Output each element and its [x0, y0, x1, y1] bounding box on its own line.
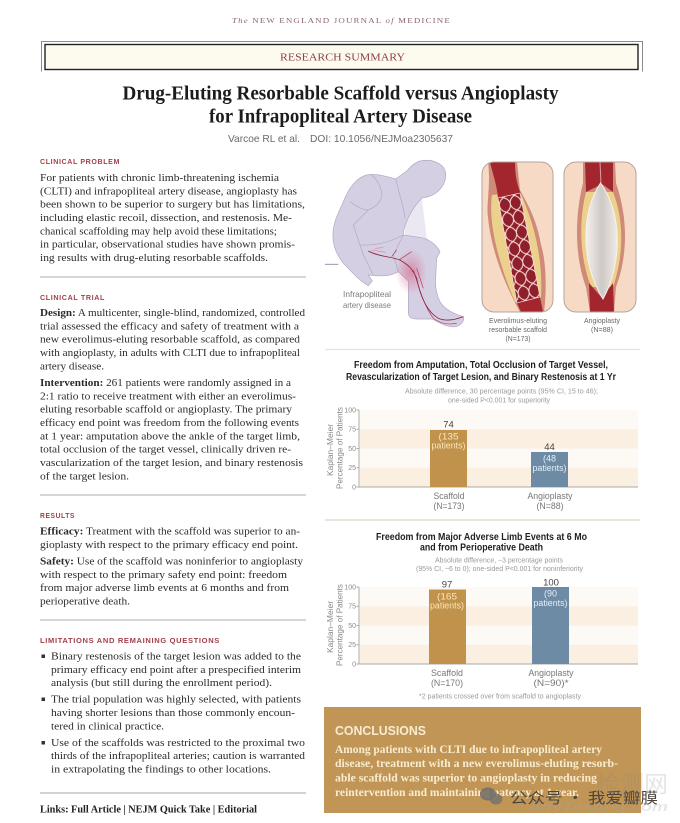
- chart subtitle: Absolute difference, −3 percentage points: [435, 558, 563, 564]
- citation: Varcoe RL et al.: [228, 133, 300, 145]
- text: intervention: total occlusion of the target vessel, clinically driven re-: [40, 444, 291, 456]
- panel: conclusions: CONCLUSIONS: [335, 724, 426, 738]
- panel: conclusions: [324, 707, 641, 813]
- text: efficacy: [40, 526, 300, 551]
- bar: angioplasty 100: (90: [544, 588, 557, 598]
- watermark: 公众号 · 我爱瓣膜: [510, 787, 658, 808]
- y axis labels: 25: [348, 642, 356, 649]
- panel: clinical trial: [40, 295, 306, 482]
- caption: scaffold: resorbable scaffold: [489, 325, 547, 334]
- bullet: trial population: [42, 694, 301, 732]
- bullet: trial population: tered in clinical practice.: [51, 720, 164, 732]
- conclusions text: disease, treatment with a new everolimus-eluting resorb-: [335, 758, 618, 770]
- conclusions text: Among patients with CLTI due to infrapopliteal artery: [335, 744, 602, 756]
- panel: limitations and remaining questions: LIMITATIONS AND REMAINING QUESTIONS: [40, 638, 220, 645]
- chart: primary safety end point: [325, 532, 638, 700]
- text: efficacy: Efficacy: Treatment with the scaffold was superior to an-: [40, 526, 300, 538]
- text: clinical problem body: For patients with chronic limb-threatening ischemia: [40, 172, 279, 184]
- label: infrapopliteal artery disease: [343, 289, 391, 310]
- chart subtitle: Absolute difference, 30 percentage points (95% CI, 15 to 46);: [405, 388, 598, 396]
- text: intervention: Intervention: 261 patients were randomly assigned in a: [40, 377, 291, 389]
- y axis labels: Percentage of Patients: [334, 584, 344, 666]
- caption: scaffold: (N=173): [506, 334, 531, 343]
- chart subtitle: (95% CI, −6 to 0); one-sided P<0.001 for noninferiority: [416, 566, 583, 573]
- caption: scaffold: [489, 316, 547, 343]
- text: intervention: at 1 year: amputation above the ankle of the target limb,: [40, 430, 300, 442]
- bar: scaffold 97: patients): [430, 600, 464, 610]
- y axis labels: [325, 407, 356, 492]
- text: intervention: efficacy end point was freedom from the following events: [40, 417, 299, 429]
- text: intervention: 2:1 ratio to receive treatment with either an everolimus-: [40, 390, 296, 402]
- citation: [228, 133, 453, 145]
- text: clinical problem body: including elastic recoil, dissection, and restenosis. Me-: [40, 212, 292, 224]
- bullet: use of scaffolds: thirds of the infrapopliteal arteries; caution is warranted: [51, 750, 306, 762]
- y axis labels: 75: [348, 604, 356, 610]
- chart subtitle: [416, 558, 583, 573]
- y axis labels: 0: [352, 662, 356, 668]
- bar: scaffold 74: (135: [438, 432, 458, 442]
- y axis labels: [325, 584, 356, 668]
- bar: scaffold 97: 97: [442, 580, 452, 590]
- y axis labels: 25: [348, 465, 356, 472]
- bullet: binary restenosis: primary efficacy end point after a prespecified interim: [51, 664, 301, 676]
- watermark: [480, 765, 669, 814]
- chart title: Revascularization of Target Lesion, and Binary Restenosis at 1 Yr: [346, 372, 616, 383]
- y axis labels: 0: [352, 484, 356, 492]
- y axis labels: 50: [348, 446, 356, 453]
- caption: angioplasty: Angioplasty: [584, 316, 620, 325]
- title: [122, 82, 558, 128]
- chart title: [376, 532, 587, 554]
- bar: scaffold 97: [429, 580, 466, 664]
- text: intervention: vascularization of the target lesion, and binary restenosis: [40, 457, 303, 469]
- bar: angioplasty 44: [531, 442, 568, 487]
- x axis labels: (N=170): [431, 678, 463, 688]
- title: Drug-Eluting Resorbable Scaffold versus Angioplasty: [122, 82, 558, 104]
- conclusions text: [335, 744, 618, 799]
- text: intervention: of the target lesion.: [40, 470, 129, 482]
- footnote: *2 patients crossed over from scaffold to angioplasty: [419, 694, 581, 700]
- text: clinical problem body: (CLTI) and infrapopliteal artery disease, angioplasty has: [40, 186, 297, 198]
- text: intervention: eluting resorbable scaffold or angioplasty. The primary: [40, 404, 293, 416]
- text: clinical problem body: in particular, observational studies have shown promis-: [40, 238, 295, 250]
- frame: scaffold panel: [482, 162, 553, 312]
- text: clinical problem body: been shown to be superior to surgery but has limitations,: [40, 198, 305, 210]
- y axis labels: 50: [348, 623, 356, 630]
- bar: angioplasty 100: 100: [543, 578, 559, 588]
- bar: angioplasty 44: patients): [532, 463, 566, 473]
- watermark: AnyTesting.com: [527, 799, 669, 814]
- bullet: binary restenosis: analysis (but still during the enrollment period).: [51, 677, 272, 689]
- bar: scaffold 74: patients): [432, 440, 466, 450]
- y axis labels: Kaplan–Meier: [325, 601, 335, 653]
- text: design: trial assessed the efficacy and safety of treatment with a: [40, 320, 299, 332]
- panel: results: RESULTS: [40, 513, 75, 520]
- bullet: binary restenosis: Binary restenosis of the target lesion was added to the: [51, 650, 301, 662]
- illustration: everolimus-eluting resorbable scaffold: [482, 162, 553, 312]
- bar: angioplasty 100: [532, 578, 569, 664]
- y axis labels: 100: [344, 408, 356, 414]
- x axis labels: Angioplasty: [528, 491, 573, 501]
- y axis labels: 75: [348, 426, 356, 434]
- panel: results: [40, 513, 303, 608]
- x axis labels: (N=88): [536, 501, 564, 511]
- x axis labels: [434, 491, 573, 511]
- text: safety: [40, 556, 303, 608]
- bullet: use of scaffolds: in extrapolating the findings to other locations.: [51, 764, 271, 776]
- text: clinical problem body: chanical scaffolding may help avoid these limitations;: [40, 226, 277, 238]
- frame: angioplasty panel: [564, 162, 636, 312]
- y axis labels: Kaplan–Meier: [325, 424, 335, 476]
- illustration: patient with infrapopliteal artery disease: [325, 160, 464, 327]
- panel: clinical problem: CLINICAL PROBLEM: [40, 159, 120, 166]
- watermark: 检测网: [596, 765, 668, 799]
- chart: primary efficacy end point: [325, 360, 638, 511]
- x axis labels: Scaffold: [431, 668, 463, 678]
- banner: research summary: RESEARCH SUMMARY: [280, 52, 405, 64]
- links: Links: Full Article | NEJM Quick Take | Editorial: [40, 804, 257, 816]
- bar: scaffold 74: 74: [443, 420, 454, 430]
- title: for Infrapopliteal Artery Disease: [209, 106, 472, 128]
- bar: scaffold 97: (165: [437, 592, 457, 602]
- panel: limitations and remaining questions: [40, 638, 306, 776]
- illustration: angioplasty balloon: [564, 162, 636, 312]
- chart subtitle: one-sided P<0.001 for superiority: [448, 398, 550, 404]
- bar: angioplasty 44: (48: [543, 454, 556, 464]
- bar: angioplasty 100: patients): [534, 598, 568, 608]
- chart title: [346, 360, 616, 383]
- x axis labels: [431, 668, 574, 688]
- text: design: artery disease.: [40, 360, 104, 372]
- conclusions text: reintervention and maintaining patency at 1 year.: [335, 787, 579, 799]
- y axis labels: Percentage of Patients: [334, 407, 344, 489]
- x axis labels: Angioplasty: [528, 668, 574, 678]
- x axis labels: (N=90)*: [534, 678, 569, 688]
- text: safety: Safety: Use of the scaffold was noninferior to angioplasty: [40, 556, 303, 568]
- x axis labels: Scaffold: [434, 491, 464, 501]
- bar: angioplasty 44: 44: [544, 442, 555, 453]
- bullet: binary restenosis: [42, 650, 301, 689]
- bullet: use of scaffolds: Use of the scaffolds was restricted to the proximal two: [51, 737, 306, 749]
- chart title: Freedom from Major Adverse Limb Events at 6 Mo: [376, 532, 587, 543]
- text: efficacy: gioplasty with respect to the primary efficacy end point.: [40, 539, 298, 551]
- text: design: new everolimus-eluting resorbable scaffold, as compared: [40, 334, 301, 346]
- chart title: and from Perioperative Death: [420, 542, 543, 554]
- chart title: Freedom from Amputation, Total Occlusion of Target Vessel,: [354, 360, 608, 371]
- y axis labels: 100: [344, 584, 356, 592]
- banner: research summary: [42, 42, 642, 72]
- bullet: trial population: having shorter lesions than those commonly encoun-: [51, 707, 295, 719]
- text: safety: from major adverse limb events at 6 months and from: [40, 582, 289, 594]
- caption: angioplasty: (N=88): [591, 325, 613, 334]
- chart subtitle: [405, 388, 598, 404]
- caption: scaffold: Everolimus-eluting: [489, 316, 547, 325]
- bullet: trial population: The trial population was highly selected, with patients: [51, 694, 301, 706]
- text: safety: perioperative death.: [40, 596, 130, 608]
- conclusions text: able scaffold was superior to angioplasty in reducing: [335, 772, 597, 784]
- text: clinical problem body: [40, 172, 305, 264]
- journal masthead: The NEW ENGLAND JOURNAL of MEDICINE: [232, 16, 451, 25]
- caption: angioplasty: [584, 316, 620, 334]
- citation: DOI: 10.1056/NEJMoa2305637: [310, 133, 453, 145]
- x axis labels: (N=173): [434, 501, 465, 511]
- bullet: use of scaffolds: [42, 737, 306, 776]
- panel: clinical trial: CLINICAL TRIAL: [40, 295, 105, 302]
- bar: scaffold 74: [430, 420, 467, 487]
- text: safety: with respect to the primary safety end point: freedom: [40, 569, 287, 581]
- text: design: [40, 307, 306, 372]
- text: intervention: [40, 377, 303, 482]
- panel: clinical problem: [40, 159, 305, 264]
- label: infrapopliteal artery disease: Infrapopliteal: [343, 289, 391, 299]
- text: design: with angioplasty, in adults with CLTI due to infrapopliteal: [40, 347, 300, 359]
- text: clinical problem body: ing results with drug-eluting resorbable scaffolds.: [40, 252, 268, 264]
- label: infrapopliteal artery disease: artery disease: [343, 300, 391, 310]
- text: design: Design: A multicenter, single-blind, randomized, controlled: [40, 307, 306, 319]
